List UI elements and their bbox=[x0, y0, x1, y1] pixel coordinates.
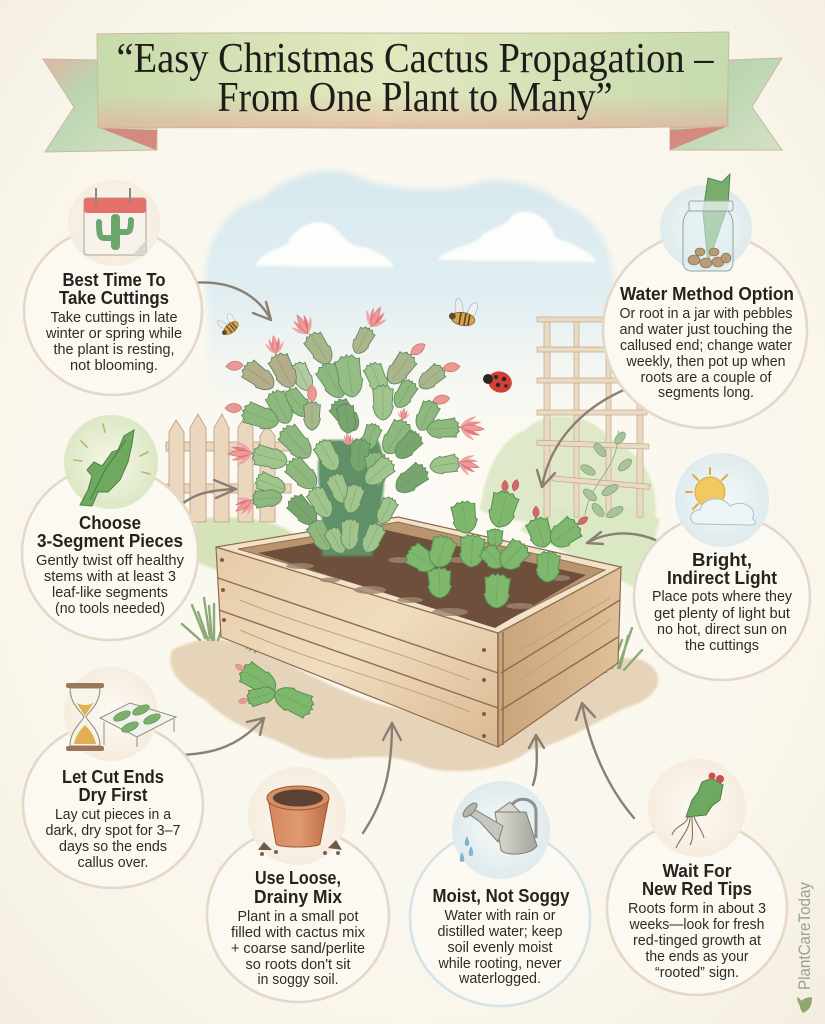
body text: the ends as your bbox=[646, 948, 749, 965]
planter left face bbox=[216, 547, 498, 747]
soil bbox=[258, 530, 586, 628]
body text: Take cuttings in late bbox=[50, 309, 178, 326]
body text: the cuttings bbox=[685, 637, 759, 654]
panel: let cut ends dry first bbox=[23, 667, 203, 888]
body text: dark, dry spot for 3–7 bbox=[46, 822, 180, 839]
panel: use loose drainy mix: Drainy Mix bbox=[254, 886, 343, 907]
body text: soil evenly moist bbox=[448, 939, 553, 956]
arrow: moist bbox=[529, 735, 544, 785]
panel: wait for new red tips: New Red Tips bbox=[642, 878, 752, 899]
left grass bbox=[192, 517, 295, 570]
title text: “Easy Christmas Cactus Propagation – bbox=[116, 36, 714, 82]
heading: Best Time To bbox=[62, 269, 166, 290]
watermark: PlantCareToday: PlantCareToday bbox=[795, 882, 814, 990]
body text: (no tools needed) bbox=[55, 600, 165, 617]
trellis bbox=[537, 317, 650, 517]
body text: not blooming. bbox=[70, 357, 158, 374]
body text: no hot, direct sun on bbox=[657, 621, 787, 638]
icon: jar with cutting bbox=[660, 174, 752, 271]
cactus stems bbox=[238, 324, 461, 557]
arrows bbox=[167, 282, 665, 833]
trellis vine bbox=[579, 430, 634, 520]
body text bbox=[652, 588, 792, 654]
body text: and water just touching the bbox=[620, 321, 792, 338]
body text: Water with rain or bbox=[444, 907, 556, 924]
arrow: wait bbox=[576, 703, 634, 818]
heading: Use Loose, bbox=[255, 867, 341, 888]
title banner: From One Plant to Many” bbox=[218, 75, 612, 121]
panel: choose 3-segment pieces: 3-Segment Pieces bbox=[37, 530, 183, 551]
panel: moist not soggy bbox=[410, 781, 590, 1006]
icon: sun and cloud bbox=[675, 453, 769, 547]
panel: best time to take cuttings bbox=[24, 180, 202, 395]
cactus shadow mass bbox=[318, 440, 384, 556]
arrow: let cut ends bbox=[174, 718, 264, 755]
title banner bbox=[43, 32, 782, 152]
body text bbox=[36, 552, 184, 617]
arrow: bright light bbox=[587, 532, 665, 545]
cloud left bbox=[255, 222, 394, 267]
body text: callus over. bbox=[78, 854, 148, 871]
arrow: water method bbox=[537, 387, 631, 487]
icon: calendar bbox=[68, 180, 160, 266]
young cuttings in soil bbox=[402, 479, 590, 609]
panel: bright indirect light: Indirect Light bbox=[667, 567, 777, 588]
body text: winter or spring while bbox=[45, 325, 182, 342]
body text bbox=[438, 907, 562, 987]
wooden fence bbox=[166, 414, 291, 522]
body text: leaf-like segments bbox=[52, 584, 168, 601]
body text: so roots don't sit bbox=[246, 956, 351, 973]
body text: days so the ends bbox=[59, 838, 167, 855]
background hedge bbox=[480, 416, 656, 527]
body text: filled with cactus mix bbox=[231, 924, 365, 941]
panel: best time to take cuttings: Take Cuttings bbox=[59, 287, 169, 308]
heading: Moist, Not Soggy bbox=[432, 885, 570, 906]
icon: watering can bbox=[452, 781, 550, 879]
cutting three bbox=[477, 536, 533, 609]
panel: bright indirect light bbox=[634, 453, 810, 680]
body text: “rooted” sign. bbox=[655, 964, 739, 981]
icon: terracotta pot bbox=[248, 767, 346, 865]
grass tufts bbox=[182, 598, 642, 672]
cutting one bbox=[402, 533, 458, 598]
cloud right bbox=[437, 212, 597, 262]
arrow: best time bbox=[190, 282, 271, 320]
body text bbox=[231, 908, 365, 988]
body text: the plant is resting, bbox=[54, 341, 174, 358]
body text: get plenty of light but bbox=[654, 605, 791, 622]
body text: roots are a couple of bbox=[640, 369, 772, 386]
body text bbox=[628, 900, 766, 981]
plank lines bbox=[218, 578, 620, 747]
heading: Bright, bbox=[692, 549, 752, 570]
left ribbon tail bbox=[43, 59, 157, 152]
banner body bbox=[97, 32, 729, 128]
cutting on ground bbox=[234, 659, 317, 720]
heading: Choose bbox=[79, 512, 141, 533]
bee left bbox=[214, 310, 242, 338]
soil patch on ground bbox=[170, 640, 658, 771]
heading: Let Cut Ends bbox=[62, 766, 164, 787]
panel: choose 3-segment pieces bbox=[22, 415, 198, 640]
body text: Roots form in about 3 bbox=[628, 900, 766, 917]
panel: wait for new red tips bbox=[607, 759, 787, 995]
soil speckles bbox=[286, 557, 570, 616]
planter rim bbox=[216, 517, 621, 633]
heading: Water Method Option bbox=[620, 283, 794, 304]
panel: let cut ends dry first: Dry First bbox=[78, 784, 148, 805]
garden scene bbox=[166, 171, 660, 771]
body text bbox=[620, 305, 792, 401]
planter inner wall bbox=[238, 522, 605, 625]
panel: use loose drainy mix bbox=[207, 767, 389, 1002]
banner blush bbox=[97, 32, 729, 128]
body text bbox=[45, 309, 182, 374]
arrow: use loose bbox=[363, 723, 401, 833]
body text: while rooting, never bbox=[438, 955, 562, 972]
arrow: choose bbox=[167, 480, 236, 520]
wooden planter bbox=[216, 517, 621, 747]
body text: Plant in a small pot bbox=[238, 908, 359, 925]
planter nails bbox=[220, 558, 486, 738]
icon: hourglass and drying rack bbox=[64, 667, 176, 761]
heading: Wait For bbox=[662, 860, 732, 881]
icon: rooted cutting bbox=[648, 759, 746, 857]
ribbon folds bbox=[100, 126, 728, 150]
Christmas cactus bbox=[225, 302, 485, 557]
body text: waterlogged. bbox=[458, 970, 541, 987]
body text: in soggy soil. bbox=[258, 971, 338, 988]
body text: + coarse sand/perlite bbox=[231, 940, 365, 957]
body text: weeks—look for fresh bbox=[629, 916, 764, 933]
body text: red-tinged growth at bbox=[633, 932, 762, 949]
right ribbon tail bbox=[670, 58, 782, 150]
body text: Gently twist off healthy bbox=[36, 552, 184, 569]
body text: stems with at least 3 bbox=[44, 568, 176, 585]
cutting four bbox=[524, 506, 590, 583]
body text: distilled water; keep bbox=[438, 923, 562, 940]
body text: segments long. bbox=[658, 384, 754, 401]
watercolor sky bbox=[204, 171, 616, 459]
body text: callused end; change water bbox=[620, 337, 792, 354]
icon: cactus segment bbox=[64, 415, 158, 509]
body text: Lay cut pieces in a bbox=[55, 806, 172, 823]
bee right bbox=[448, 296, 480, 328]
ladybug bbox=[483, 368, 515, 396]
cactus flowers bbox=[225, 302, 485, 519]
right lawn bbox=[520, 507, 660, 590]
body text: weekly, then pot up when bbox=[626, 353, 786, 370]
body text: Or root in a jar with pebbles bbox=[620, 305, 792, 322]
planter right face bbox=[498, 567, 621, 747]
body text bbox=[46, 806, 180, 871]
panel: water method option bbox=[603, 174, 807, 428]
body text: Place pots where they bbox=[652, 588, 792, 605]
cutting two bbox=[450, 479, 520, 568]
